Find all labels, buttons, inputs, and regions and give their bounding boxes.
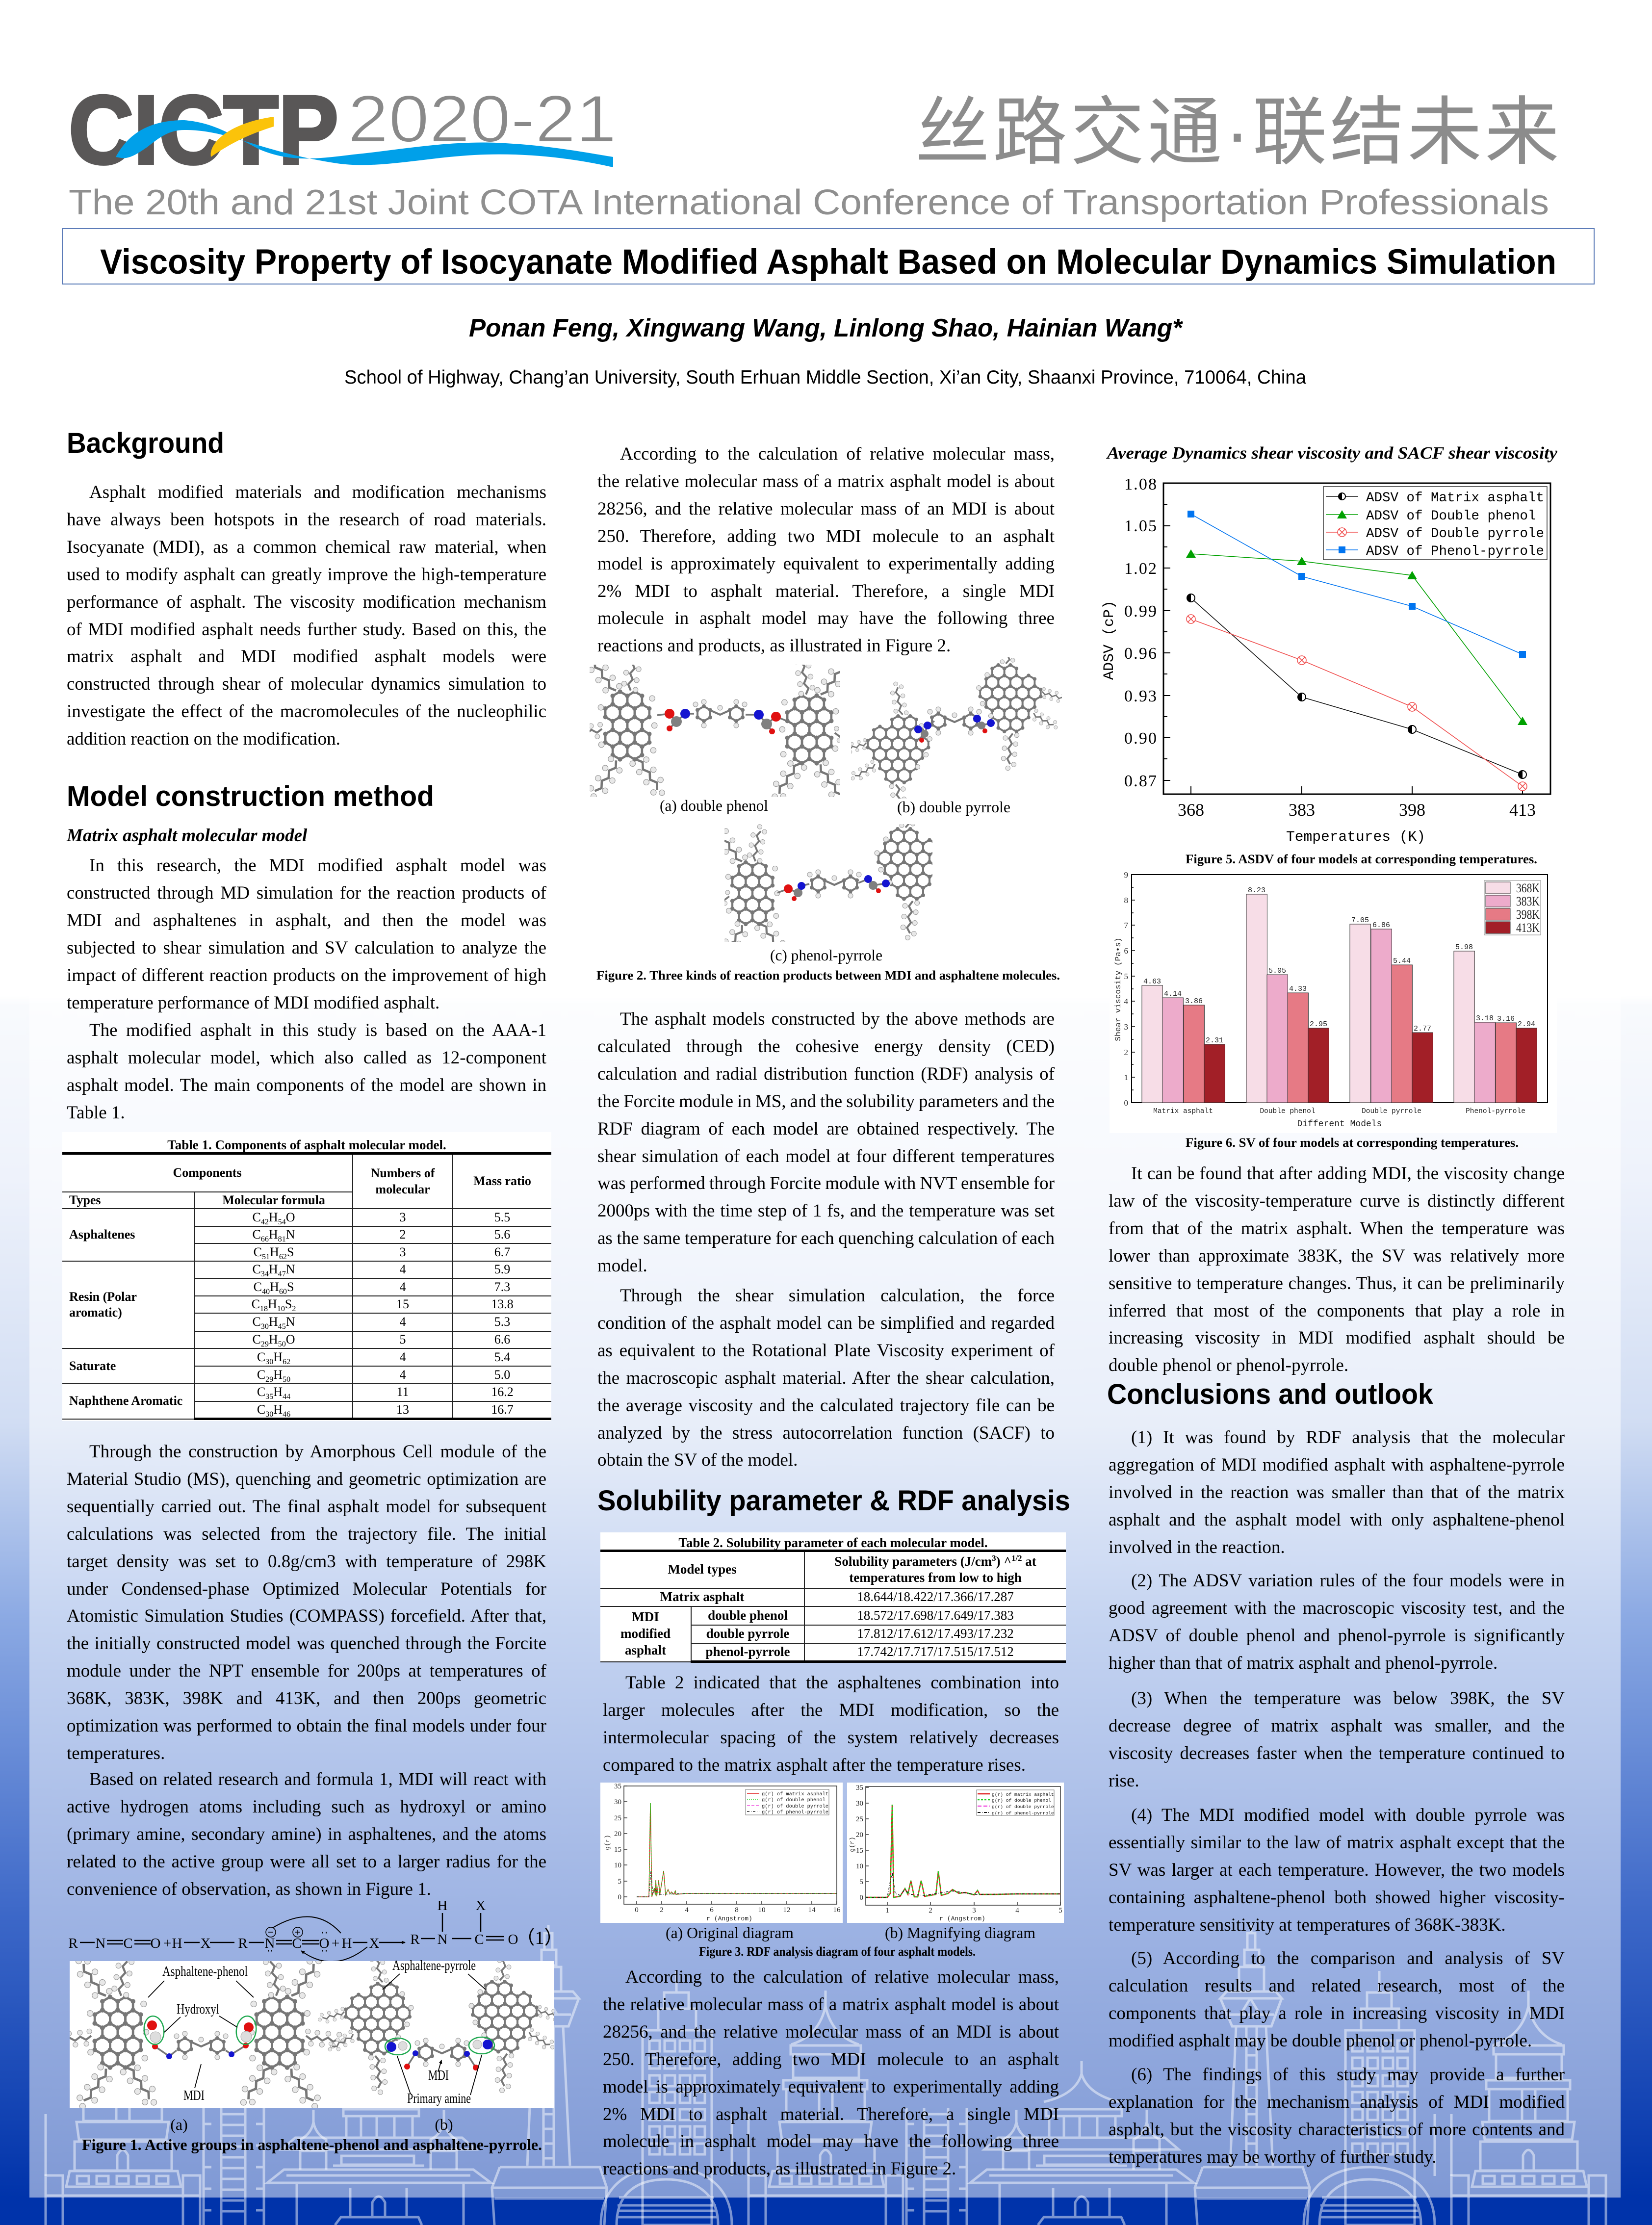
- x axis tick labels: [1178, 800, 1536, 820]
- table 2: solubility parameters: Model types: [668, 1562, 737, 1577]
- series: double pyrrole: [1187, 615, 1527, 791]
- table 1: components of asphalt molecular model: 3: [400, 1245, 406, 1259]
- table 1: components of asphalt molecular model: C51H62S: [254, 1245, 294, 1261]
- reaction equation 1: C: [474, 1932, 484, 1947]
- bars: double phenol: [1246, 894, 1329, 1103]
- figure 3a: RDF original chart: 15: [614, 1846, 621, 1854]
- heading: Solubility parameter and RDF analysis: Solubility parameter & RDF analysis: [597, 1485, 1070, 1517]
- figure 3a: RDF original chart: [600, 1783, 843, 1923]
- table 2: solubility parameters: MDI: [632, 1609, 659, 1624]
- figure 3b: RDF magnified chart: g(r): [849, 1837, 856, 1852]
- figure 3a: RDF original chart: 0: [618, 1893, 621, 1901]
- x axis tick labels: 398: [1399, 800, 1425, 820]
- figure 3b: RDF magnified chart: g(r) of double phenol: [992, 1798, 1051, 1803]
- figure 2c: phenol-pyrrole molecule: [694, 792, 972, 965]
- table 1: components of asphalt molecular model: 11: [396, 1385, 409, 1399]
- reaction equation 1: R: [68, 1936, 78, 1951]
- reaction equation 1: （1）: [516, 1928, 563, 1948]
- figure 2b caption: (b) double pyrrole: [897, 798, 1010, 816]
- table 2: solubility parameters: 17.742/17.717/17.515/17.512: [857, 1644, 1014, 1659]
- x axis group labels: [1153, 1108, 1525, 1115]
- y axis tick labels: [1124, 475, 1157, 790]
- series: phenol-pyrrole: [1187, 511, 1526, 658]
- y axis tick labels: 1.05: [1124, 517, 1157, 535]
- reaction equation 1: N: [438, 1932, 448, 1947]
- text: background paragraph: performance of asphalt. The viscosity modification mechanism: [67, 592, 546, 612]
- bars: double pyrrole: [1350, 924, 1433, 1103]
- chart legend: ADSV of Matrix asphalt: [1366, 491, 1544, 506]
- text: background paragraph: [67, 482, 546, 749]
- affiliation: School of Highway, Chang’an University, South Erhuan Middle Section, Xi’an City, Shaanxi Province, 710064, China: [344, 367, 1306, 388]
- figure 3a: RDF original chart: 0: [635, 1906, 639, 1914]
- figure 3a: RDF original chart: 8: [735, 1906, 739, 1914]
- bar value labels: 2.77: [1414, 1025, 1431, 1033]
- figures layer: [69, 446, 1558, 2153]
- figure 3a: RDF original chart: 6: [710, 1906, 714, 1914]
- text: background paragraph: matrix asphalt and MDI modified asphalt models were: [67, 647, 546, 667]
- y axis ticks: 2: [1124, 1048, 1128, 1057]
- table 1: components of asphalt molecular model: 5.9: [494, 1262, 510, 1276]
- reaction equation 1: X: [369, 1936, 380, 1951]
- figure 3a: RDF original chart: 5: [618, 1878, 621, 1886]
- reaction equation 1: O: [319, 1936, 329, 1951]
- text: second relative mass paragraph: [603, 1967, 1059, 2179]
- table 1: components of asphalt molecular model: 4: [400, 1350, 406, 1364]
- bar value labels: 5.44: [1393, 957, 1411, 965]
- figure 1 arrows: [148, 1974, 486, 2095]
- table 1: components of asphalt molecular model: Resin (Polar: [69, 1290, 137, 1304]
- figure 3a: RDF original chart: g(r) of double pyrrole: [762, 1804, 828, 1810]
- reaction equation 1: O: [508, 1932, 518, 1947]
- figure 5: ADSV line chart: [1097, 470, 1555, 849]
- reaction equation 1: R: [410, 1932, 420, 1947]
- figure 3a: RDF original chart: g(r) of phenol-pyrrole: [762, 1810, 828, 1815]
- x axis title: Different Models: [1297, 1119, 1382, 1129]
- figure 3b: RDF magnified chart: g(r) of double pyrrole: [992, 1804, 1054, 1810]
- bar value labels: 7.05: [1351, 916, 1369, 925]
- table 1: components of asphalt molecular model: C34H47N: [252, 1262, 295, 1278]
- text: second relative mass paragraph: the relative molecular mass of a matrix asphalt model is about: [603, 1994, 1059, 2015]
- bar value labels: 6.86: [1372, 921, 1390, 930]
- figure 3a sublabel: (a) Original diagram: [666, 1924, 794, 1941]
- text: background paragraph: investigate the effect of the macromolecules of the nucleophilic: [67, 701, 546, 722]
- figure 3a: RDF original chart: 12: [783, 1906, 791, 1914]
- figure 3b: RDF magnified chart: 25: [856, 1815, 863, 1823]
- text: CED and RDF paragraph: The asphalt models constructed by the above methods are: [620, 1009, 1055, 1029]
- table 1: components of asphalt molecular model: Saturate: [69, 1359, 116, 1373]
- table 2: solubility parameters: [600, 1532, 1066, 1661]
- text: conclusion 6: (6) The findings of this study may provide a further explanation for the mechanism analysis of MDI modified asphalt, but the viscosity characteristics of more contents and temperatures may be worthy of further study.: [1109, 2065, 1565, 2167]
- x axis title: Temperatures (K): [1286, 829, 1425, 846]
- table 2: solubility parameters: 18.644/18.422/17.366/17.287: [857, 1589, 1014, 1604]
- figure 3a: RDF original chart: 2: [660, 1906, 664, 1914]
- y axis ticks: 1: [1124, 1073, 1128, 1082]
- text: column 2 reaction paragraph: 28256, and the relative molecular mass of an MDI is about: [597, 499, 1055, 519]
- bar value labels: 4.33: [1289, 985, 1307, 993]
- text: background paragraph: of MDI modified asphalt needs further study. Based on this, the: [67, 620, 546, 640]
- chart legend: [1323, 487, 1547, 560]
- text: column 2 reaction paragraph: 250. Therefore, adding two MDI molecule to an asphalt: [597, 526, 1055, 546]
- text: conclusion 2: (2) The ADSV variation rules of the four models were in good agreement with the macroscopic viscosity test, and the ADSV of double phenol and phenol-pyrrole is significantly higher than that of matrix asphalt and phenol-pyrrole.: [1109, 1571, 1565, 1673]
- chart heading: average dynamics shear viscosity: Average Dynamics shear viscosity and SACF shear viscosity: [1106, 443, 1557, 463]
- text: conclusion 5: (5) According to the comparison and analysis of SV calculation results and related research, most of the components that play a role in increasing viscosity in MDI modified asphalt may be double phenol or phenol-pyrrole.: [1109, 1948, 1565, 2051]
- text: second relative mass paragraph: 250. Therefore, adding two MDI molecule to an asphalt: [603, 2049, 1059, 2070]
- table 2: solubility parameters: Solubility parameters (J/cm3) ^1/2 at: [834, 1553, 1036, 1569]
- bar value labels: 2.95: [1310, 1020, 1327, 1029]
- table 1: components of asphalt molecular model: Naphthene Aromatic: [69, 1394, 182, 1408]
- table 1: components of asphalt molecular model: [62, 1132, 551, 1421]
- table 1: components of asphalt molecular model: Table 1. Components of asphalt molecular model.: [167, 1138, 446, 1152]
- table 2: solubility parameters: asphalt: [625, 1643, 666, 1657]
- reaction equation 1: O: [151, 1936, 160, 1951]
- bars: phenol-pyrrole: [1454, 951, 1537, 1103]
- figure 1 caption: Figure 1. Active groups in asphaltene-phenol and asphaltene-pyrrole.: [82, 2136, 542, 2153]
- table 2: solubility parameters: double phenol: [708, 1608, 788, 1623]
- figure 1 labels: [162, 1958, 476, 2106]
- table 1: components of asphalt molecular model: C42H54O: [252, 1210, 295, 1226]
- table 1: components of asphalt molecular model: 6.6: [494, 1332, 510, 1346]
- y axis tick labels: 0.96: [1124, 645, 1157, 663]
- table 1: components of asphalt molecular model: 15: [396, 1297, 409, 1311]
- figure 3b: RDF magnified chart: 0: [859, 1894, 863, 1902]
- table 1: components of asphalt molecular model: molecular: [375, 1182, 430, 1196]
- text: background paragraph: Asphalt modified materials and modification mechanisms: [89, 482, 546, 502]
- table 1: components of asphalt molecular model: 5.6: [494, 1227, 510, 1242]
- text: column 2 reaction paragraph: 2% MDI to asphalt material. Therefore, a single MDI: [597, 581, 1055, 601]
- figure 3b: RDF magnified chart: 2: [929, 1907, 932, 1915]
- figure 3b: RDF magnified chart: 4: [1015, 1907, 1019, 1915]
- figure 3a: RDF original chart: 30: [614, 1798, 621, 1806]
- table 1: components of asphalt molecular model: 5: [400, 1332, 406, 1346]
- figure 2c caption: (c) phenol-pyrrole: [770, 946, 882, 964]
- title box: Viscosity Property of Isocyanate Modified Asphalt Based on Molecular Dynamics Simulation: [100, 243, 1556, 282]
- figure 1 sublabel a: (a): [170, 2116, 188, 2133]
- y axis tick labels: 0.90: [1124, 729, 1157, 748]
- table 1: components of asphalt molecular model: Components: [173, 1165, 242, 1180]
- table 1: components of asphalt molecular model: C30H45N: [252, 1315, 295, 1331]
- figure 6: shear viscosity bar chart: [1110, 870, 1557, 1133]
- table 1: components of asphalt molecular model: Asphaltenes: [69, 1227, 135, 1242]
- series: double phenol: [1186, 549, 1527, 725]
- table 1: components of asphalt molecular model: Molecular formula: [222, 1193, 325, 1207]
- Chinese slogan: 丝路交通·联结未来: [915, 91, 1559, 174]
- figure 3a: RDF original chart: g(r): [604, 1835, 611, 1850]
- x axis group labels: Matrix asphalt: [1153, 1108, 1213, 1115]
- table 1: components of asphalt molecular model: 7.3: [494, 1280, 510, 1294]
- y axis ticks: 7: [1124, 921, 1128, 930]
- figure 3a: RDF original chart: 35: [614, 1783, 621, 1790]
- figure 5 caption: Figure 5. ASDV of four models at corresponding temperatures.: [1186, 852, 1537, 866]
- background skyline illustration: [44, 1925, 1607, 2225]
- text: background paragraph: used to modify asphalt can greatly improve the high-temperature: [67, 565, 546, 585]
- y axis tick labels: 1.02: [1124, 560, 1157, 578]
- table 1: components of asphalt molecular model: 4: [400, 1315, 406, 1329]
- table 2: solubility parameters: double pyrrole: [706, 1626, 789, 1641]
- figure 3b: RDF magnified chart: 3: [972, 1907, 976, 1915]
- bar value labels: 3.16: [1497, 1015, 1515, 1023]
- table 1: components of asphalt molecular model: 13.8: [491, 1297, 514, 1311]
- figure 3a: RDF original chart: g(r) of double phenol: [762, 1797, 826, 1803]
- text: formula 1 paragraph: Based on related research and formula 1, MDI will react with active hydrogen atoms including such as hydroxyl or amino (primary amine, secondary amine) in asphaltenes, and the atoms related to the active group were all set to a larger radius for the convenience of observation, as shown in Figure 1.: [67, 1769, 546, 1899]
- table 1: components of asphalt molecular model: C30H62: [257, 1350, 290, 1366]
- text: second relative mass paragraph: molecule in asphalt model may have the following three: [603, 2131, 1059, 2151]
- table 1: components of asphalt molecular model: 5.0: [494, 1368, 510, 1382]
- bar value labels: [1143, 886, 1535, 1045]
- x axis group labels: Double phenol: [1260, 1108, 1316, 1115]
- table 1: components of asphalt molecular model: C18H10S2: [252, 1297, 296, 1313]
- table 1: components of asphalt molecular model: 4: [400, 1280, 406, 1294]
- figure 3b sublabel: (b) Magnifying diagram: [885, 1924, 1035, 1941]
- text: CED and RDF paragraph: shear simulation of each model at four different temperatures: [597, 1146, 1055, 1166]
- figure 3b: RDF magnified chart: 10: [856, 1863, 863, 1870]
- reaction equation 1: X: [201, 1936, 211, 1951]
- table 1: components of asphalt molecular model: 16.7: [491, 1402, 514, 1417]
- figure 1 sublabel b: (b): [435, 2116, 453, 2133]
- figure 1a molecules: [51, 1952, 347, 2114]
- text: conclusion 3: (3) When the temperature was below 398K, the SV decrease degree of matrix asphalt was smaller, and the viscosity decreases faster when the temperature continued to rise.: [1109, 1688, 1565, 1791]
- table 1: components of asphalt molecular model: Numbers of: [371, 1166, 435, 1180]
- y axis ticks: 6: [1124, 946, 1128, 956]
- reaction equation 1: H: [438, 1898, 448, 1914]
- logo: CICTP 2020-21: [69, 76, 617, 184]
- figure 6 caption: Figure 6. SV of four models at corresponding temperatures.: [1186, 1136, 1519, 1150]
- text: column 2 reaction paragraph: molecule in asphalt model may have the following three: [597, 608, 1055, 628]
- figure 3a: RDF original chart: 10: [614, 1862, 621, 1869]
- figure 3b: RDF magnified chart: 30: [856, 1800, 863, 1808]
- legend: 383K: [1516, 894, 1540, 908]
- figure 3a: RDF original chart: 16: [833, 1906, 841, 1914]
- table 2: solubility parameters: phenol-pyrrole: [705, 1644, 790, 1659]
- table 1: components of asphalt molecular model: 5.3: [494, 1315, 510, 1329]
- reaction equation 1: X: [476, 1898, 486, 1914]
- table 1: components of asphalt molecular model: Mass ratio: [473, 1174, 531, 1188]
- figure 3b: RDF magnified chart: 1: [885, 1907, 889, 1915]
- logo: CICTP 2020-21: 2020-21: [348, 81, 617, 156]
- table 1: components of asphalt molecular model: 16.2: [491, 1385, 514, 1399]
- figure 3a: RDF original chart: 25: [614, 1814, 621, 1822]
- y axis ticks: 9: [1124, 870, 1128, 880]
- figure 3b: RDF magnified chart: 15: [856, 1847, 863, 1855]
- bars: matrix asphalt: [1142, 985, 1225, 1103]
- table 1: components of asphalt molecular model: 4: [400, 1368, 406, 1382]
- text: conclusion 1: (1) It was found by RDF analysis that the molecular aggregation of MDI modified asphalt with asphaltene-pyrrole involved in the reaction was smaller than that of the matrix asphalt and the asphalt model with only asphaltene-phenol involved in the reaction.: [1109, 1427, 1565, 1557]
- text: background paragraph: have always been hotspots in the research of road materials.: [67, 510, 546, 530]
- legend: 398K: [1516, 907, 1540, 922]
- reaction equation 1: H: [172, 1936, 182, 1951]
- x axis group labels: Double pyrrole: [1362, 1108, 1421, 1115]
- table 1: components of asphalt molecular model: aromatic): [69, 1305, 122, 1319]
- figure 3b: RDF magnified chart: [847, 1783, 1064, 1923]
- table 1: components of asphalt molecular model: 5.5: [494, 1210, 510, 1224]
- figure 1 labels: MDI: [428, 2068, 449, 2083]
- legend: 413K: [1516, 921, 1540, 935]
- figure 1 labels: Hydroxyl: [177, 2002, 219, 2017]
- legend: 368K: [1516, 881, 1540, 895]
- table 1: components of asphalt molecular model: C29H50: [257, 1368, 290, 1384]
- figure 3b: RDF magnified chart: g(r) of matrix asphalt: [992, 1792, 1054, 1797]
- x axis tick labels: 413: [1509, 800, 1536, 820]
- y axis tick labels: 0.99: [1124, 602, 1157, 621]
- legend: [1484, 880, 1541, 935]
- text: column 2 reaction paragraph: the relative molecular mass of a matrix asphalt model is about: [597, 471, 1055, 492]
- bar value labels: 4.63: [1143, 978, 1161, 986]
- bar value labels: 3.18: [1476, 1014, 1494, 1023]
- text: conclusion 4: (4) The MDI modified model with double pyrrole was essentially similar to the law of matrix asphalt except that the SV was larger at each temperature. However, the two models containing asphaltene-phenol both showed higher viscosity-temperature sensitivity at temperatures of 368K-383K.: [1109, 1805, 1565, 1935]
- text: column 2 reaction paragraph: reactions and products, as illustrated in Figure 2.: [597, 636, 951, 656]
- figure 3b: RDF magnified chart: g(r) of phenol-pyrrole: [992, 1811, 1054, 1816]
- figure 2b: double pyrrole molecule: [840, 629, 1068, 822]
- reaction equation 1: H: [342, 1936, 352, 1951]
- table 1: components of asphalt molecular model: 3: [400, 1210, 406, 1224]
- table 1: components of asphalt molecular model: 4: [400, 1262, 406, 1276]
- heading: Background: Background: [67, 427, 224, 459]
- table 1: components of asphalt molecular model: 13: [396, 1402, 409, 1417]
- y axis title: ADSV (cP): [1101, 600, 1118, 680]
- text: CED and RDF paragraph: RDF diagram of each model are obtained respectively. The: [597, 1119, 1055, 1139]
- reaction equation 1: [68, 1898, 563, 1962]
- text: CED and RDF paragraph: 2000ps with the time step of 1 fs, and the temperature was set: [597, 1201, 1055, 1221]
- table 1: components of asphalt molecular model: C40H60S: [254, 1280, 294, 1296]
- x axis tick labels: 368: [1178, 800, 1204, 820]
- reaction equation 1: +: [163, 1936, 171, 1951]
- text: table 2 discussion: Table 2 indicated that the asphaltenes combination into larger molecules after the MDI modification, so the intermolecular spacing of the system relatively decreases compared to the matrix asphalt after the temperature rises.: [603, 1673, 1059, 1775]
- text: column 2 reaction paragraph: model is approximately equivalent to experimentally adding: [597, 554, 1055, 574]
- table 1: components of asphalt molecular model: Types: [69, 1193, 101, 1207]
- figure 3b: RDF magnified chart: 35: [856, 1784, 863, 1792]
- figure 3b: RDF magnified chart: r (Angstrom): [939, 1915, 985, 1922]
- bar value labels: 5.05: [1268, 967, 1286, 975]
- text: CED and RDF paragraph: as the same temperature for each quenching calculation of each: [597, 1228, 1055, 1248]
- figure 3a: RDF original chart: 20: [614, 1830, 621, 1838]
- authors: Ponan Feng, Xingwang Wang, Linlong Shao, Hainian Wang*: [469, 314, 1184, 342]
- conference subtitle: The 20th and 21st Joint COTA International Conference of Transportation Professionals: [69, 183, 1549, 222]
- y axis tick labels: 0.93: [1124, 687, 1157, 705]
- table 2: solubility parameters: Table 2. Solubility parameter of each molecular model.: [678, 1535, 988, 1550]
- figure 3a: RDF original chart: 4: [685, 1906, 689, 1914]
- y axis tick labels: 0.87: [1124, 772, 1157, 790]
- figure 3b: RDF magnified chart: 20: [856, 1831, 863, 1839]
- y axis ticks: 8: [1124, 896, 1128, 905]
- text: column 2 reaction paragraph: According to the calculation of relative molecular mass,: [620, 444, 1055, 464]
- table 2: solubility parameters: Matrix asphalt: [660, 1589, 744, 1604]
- bar value labels: 8.23: [1248, 886, 1265, 895]
- figure 3a: RDF original chart: 14: [808, 1906, 816, 1914]
- text: background paragraph: addition reaction on the modification.: [67, 729, 340, 749]
- figure 1 labels: Asphaltene-phenol: [162, 1964, 248, 1979]
- text: model construction paragraph 1: In this research, the MDI modified asphalt model was constructed through MD simulation for the reaction products of MDI and asphaltenes in asphalt, and then the model was subjected to shear simulation and SV calculation to analyze the impact of different reaction products on the improvement of high temperature performance of MDI modified asphalt.: [67, 855, 546, 1013]
- table 2: solubility parameters: 17.812/17.612/17.493/17.232: [857, 1626, 1014, 1641]
- text: amorphous cell paragraph: Through the construction by Amorphous Cell module of the Material Studio (MS), quenching and geometric optimization are sequentially carried out. The final asphalt model for subsequent calculations was selected from the trajectory file. The initial target density was set to 0.8g/cm3 with temperature of 298K under Condensed-phase Optimized Molecular Potentials for Atomistic Simulation Studies (COMPASS) forcefield. After that, the initially constructed model was quenched through the Forcite module under the NPT ensemble for 200ps at temperatures of 368K, 383K, 398K and 413K, and then 200ps geometric optimization was performed to obtain the final models under four temperatures.: [67, 1442, 546, 1763]
- title box: [62, 229, 1594, 284]
- text: CED and RDF paragraph: calculation and radial distribution function (RDF) analysis of: [597, 1064, 1055, 1084]
- reaction equation 1: N: [96, 1936, 106, 1951]
- table 1: components of asphalt molecular model: C30H46: [257, 1402, 290, 1419]
- table 2: solubility parameters: temperatures from low to high: [849, 1570, 1022, 1585]
- table 1: components of asphalt molecular model: 5.4: [494, 1350, 510, 1364]
- text: column 2 reaction paragraph: [597, 444, 1055, 656]
- bar value labels: 3.86: [1185, 997, 1203, 1006]
- heading: Conclusions and outlook: Conclusions and outlook: [1107, 1378, 1434, 1410]
- reaction equation 1: +: [332, 1936, 339, 1951]
- figure 1 labels: MDI: [183, 2088, 205, 2103]
- figure 1 labels: Asphaltene-pyrrole: [392, 1958, 476, 1973]
- figure 3 caption: Figure 3. RDF analysis diagram of four asphalt models.: [699, 1944, 976, 1959]
- text: second relative mass paragraph: According to the calculation of relative molecular mass,: [625, 1967, 1059, 1987]
- y axis ticks: 5: [1124, 972, 1128, 981]
- text: CED and RDF paragraph: was performed through Forcite module with NVT ensemble for: [597, 1173, 1055, 1193]
- figure 3a: RDF original chart: 10: [758, 1906, 765, 1914]
- bar value labels: 2.94: [1518, 1020, 1535, 1029]
- figure 2 caption: Figure 2. Three kinds of reaction products between MDI and asphaltene molecules.: [596, 968, 1060, 983]
- chart legend: ADSV of Double phenol: [1366, 509, 1536, 524]
- chart legend: ADSV of Double pyrrole: [1366, 526, 1544, 542]
- text: background paragraph: Isocyanate (MDI), as a common chemical raw material, when: [67, 537, 546, 557]
- text: second relative mass paragraph: 28256, and the relative molecular mass of an MDI is about: [603, 2022, 1059, 2042]
- y axis ticks: 0: [1124, 1098, 1128, 1108]
- y axis ticks: 4: [1124, 997, 1128, 1006]
- subheading: matrix asphalt molecular model: Matrix asphalt molecular model: [67, 826, 307, 846]
- text: second relative mass paragraph: 2% MDI to asphalt material. Therefore, a single MDI: [603, 2104, 1059, 2124]
- text: second relative mass paragraph: model is approximately equivalent to experimentally adding: [603, 2077, 1059, 2097]
- x axis group labels: Phenol-pyrrole: [1466, 1108, 1525, 1115]
- reaction equation 1: C: [123, 1936, 133, 1951]
- x axis tick labels: 383: [1289, 800, 1315, 820]
- table 1: components of asphalt molecular model: C66H81N: [252, 1227, 295, 1243]
- figure 2a caption: (a) double phenol: [660, 797, 768, 814]
- y axis tick labels: 1.08: [1124, 475, 1157, 493]
- text: second relative mass paragraph: reactions and products, as illustrated in Figure 2.: [603, 2159, 956, 2179]
- reaction equation 1: R: [238, 1936, 248, 1951]
- bar value labels: 2.31: [1206, 1036, 1223, 1045]
- figure 1 labels: Primary amine: [407, 2091, 471, 2106]
- figure 2a: double phenol molecule: [563, 649, 874, 808]
- table 1: components of asphalt molecular model: 2: [400, 1227, 406, 1242]
- table 2: solubility parameters: modified: [620, 1626, 671, 1641]
- text: viscosity finding paragraph: It can be found that after adding MDI, the viscosity change law of the viscosity-temperature curve is distinctly different from that of the matrix asphalt. When the temperature was lower than approximate 383K, the SV was relatively more sensitive to temperature changes. Thus, it can be preliminarily inferred that most of the components that play a role in increasing viscosity in MDI modified asphalt should be double phenol or phenol-pyrrole.: [1109, 1164, 1565, 1375]
- figure 3a: RDF original chart: g(r) of matrix asphalt: [762, 1791, 828, 1797]
- logo: CICTP 2020-21: CICTP: [69, 76, 338, 184]
- text: shear simulation paragraph: Through the shear simulation calculation, the force condition of the asphalt model can be simplified and regarded as equivalent to the Rotational Plate Viscosity experiment of the macroscopic asphalt material. After the shear calculation, the average viscosity and the calculated trajectory file can be analyzed by the stress autocorrelation function (SACF) to obtain the SV of the model.: [597, 1286, 1055, 1470]
- y axis ticks: 3: [1124, 1022, 1128, 1032]
- figure 1: active groups panel: [70, 1960, 554, 2108]
- text: CED and RDF paragraph: model.: [597, 1256, 647, 1276]
- table 1: components of asphalt molecular model: C35H44: [257, 1385, 290, 1401]
- table 1: components of asphalt molecular model: 6.7: [494, 1245, 510, 1259]
- text: CED and RDF paragraph: the Forcite module in MS, and the solubility parameters and the: [597, 1091, 1055, 1112]
- text: background paragraph: constructed through shear of molecular dynamics simulation to: [67, 674, 546, 694]
- heading: Model construction method: Model construction method: [67, 780, 434, 812]
- y axis ticks: [1124, 870, 1128, 1108]
- chart legend: ADSV of Phenol-pyrrole: [1366, 544, 1544, 559]
- bar value labels: 5.98: [1455, 943, 1473, 952]
- figure 3b: RDF magnified chart: 5: [1058, 1907, 1062, 1915]
- table 2: solubility parameters: 18.572/17.698/17.649/17.383: [857, 1608, 1014, 1623]
- text: CED and RDF paragraph: [597, 1009, 1055, 1276]
- bar value labels: 4.14: [1164, 990, 1182, 998]
- reaction equation 1: C: [292, 1936, 302, 1951]
- series: matrix asphalt: [1187, 594, 1526, 778]
- text: CED and RDF paragraph: calculated through the cohesive energy density (CED): [597, 1036, 1055, 1057]
- figure 3a: RDF original chart: r (Angstrom): [706, 1915, 752, 1922]
- text: model construction paragraph 2: The modified asphalt in this study is based on the AAA-1 asphalt molecular model, which also called as 12-component asphalt model. The main components of the model are shown in Table 1.: [67, 1020, 546, 1123]
- y axis title: Shear viscosity (Pa•s): [1114, 937, 1123, 1041]
- reaction equation 1: N: [265, 1936, 275, 1951]
- table 1: components of asphalt molecular model: C29H50O: [252, 1332, 295, 1349]
- figure 1b molecules: [316, 1944, 566, 2096]
- figure 3b: RDF magnified chart: 5: [859, 1878, 863, 1886]
